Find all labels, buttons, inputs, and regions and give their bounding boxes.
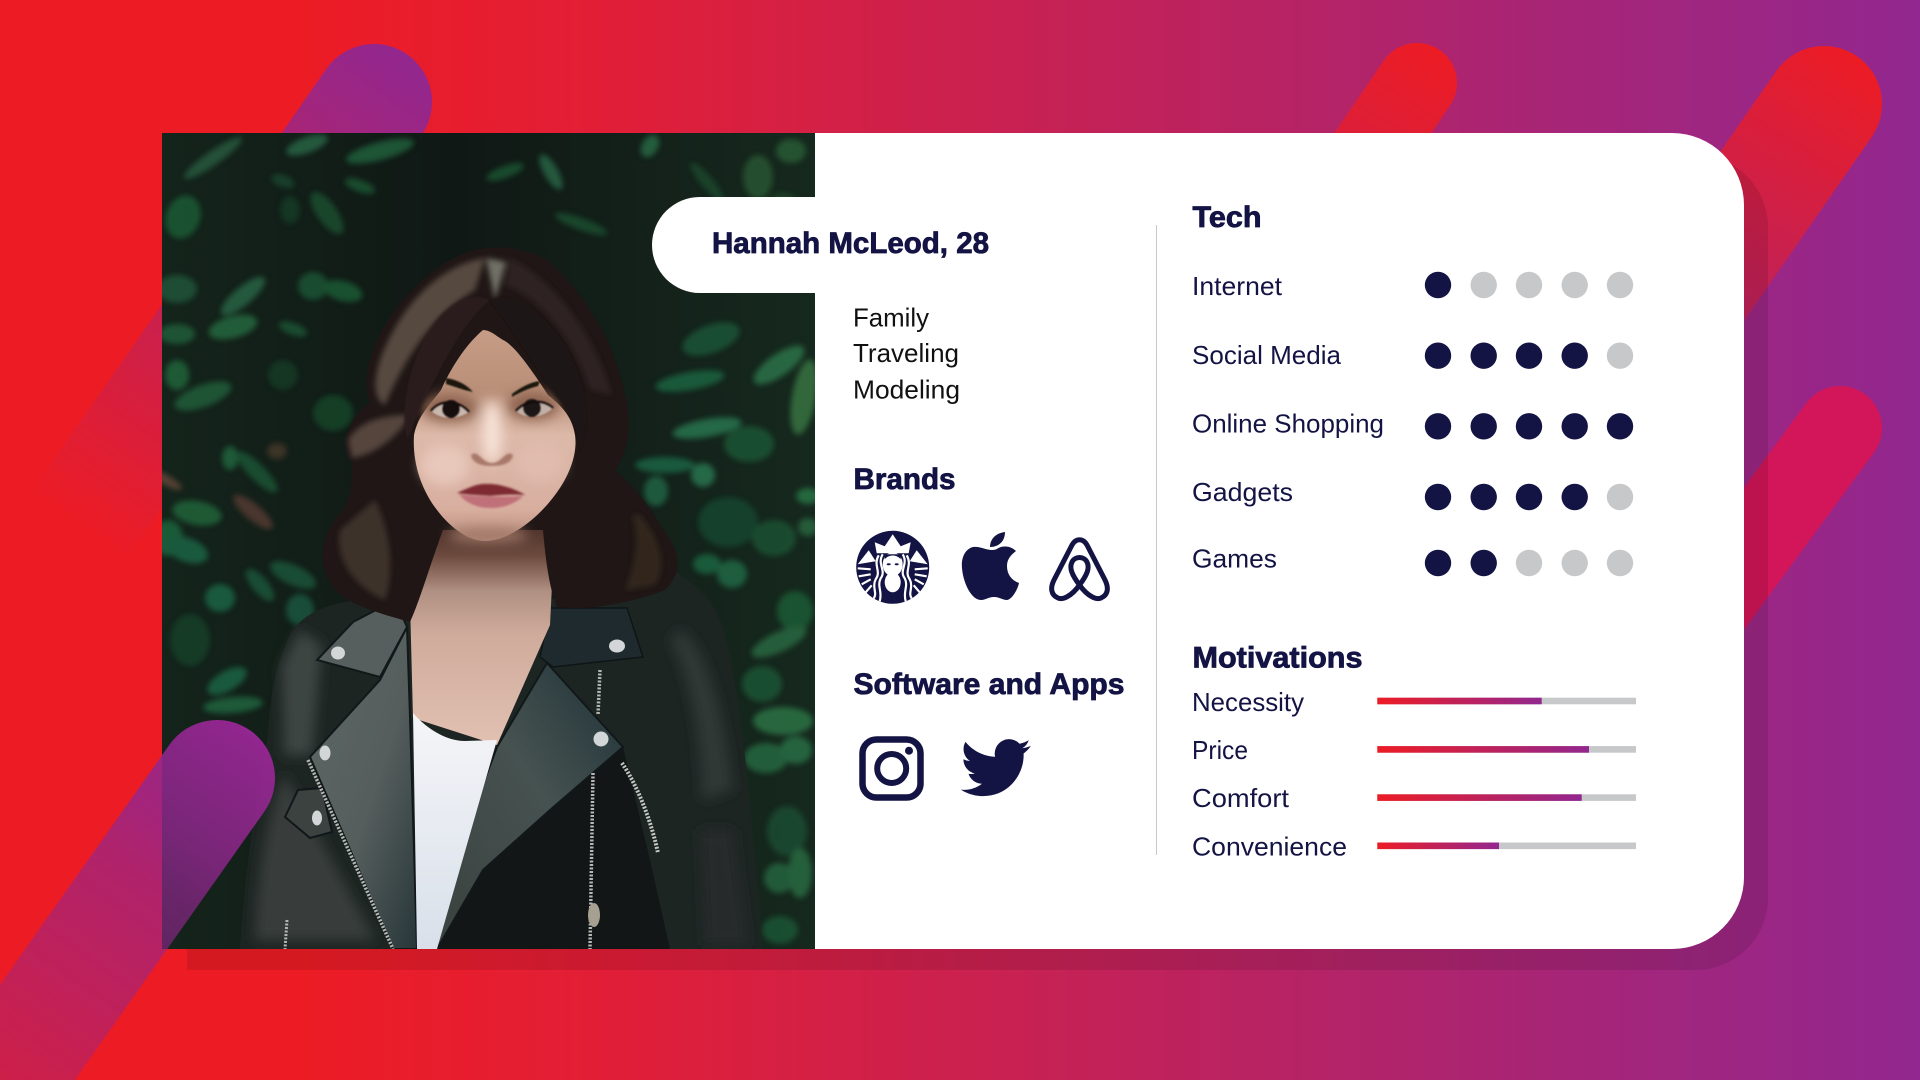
rating: online shopping: Online Shopping <box>1192 408 1384 438</box>
interests list: Modeling <box>853 374 960 404</box>
left collar <box>315 611 408 678</box>
tech ratings <box>1192 271 1633 576</box>
left lapel <box>310 627 417 949</box>
interests list <box>853 302 960 404</box>
jacket sheen <box>255 630 748 945</box>
rating: social media <box>1192 340 1633 370</box>
icon: apple <box>962 532 1019 600</box>
rating: online shopping <box>1192 408 1633 439</box>
bar: comfort: Comfort <box>1192 783 1290 813</box>
white tee <box>413 713 497 949</box>
background capsule: top centre <box>1200 83 1417 400</box>
icon: twitter <box>961 739 1031 796</box>
motivations heading: Motivations <box>1192 642 1362 674</box>
icon: instagram <box>862 740 920 798</box>
face <box>404 297 586 542</box>
bar: convenience <box>1192 832 1636 862</box>
portrait photo <box>148 130 822 949</box>
capsule overlapping the photo <box>0 720 275 1080</box>
nose <box>471 454 513 466</box>
jacket studs <box>312 640 625 826</box>
name heading: Hannah McLeod, 28 <box>712 227 989 260</box>
eye socket shadows <box>421 392 564 542</box>
software and apps heading: Software and Apps <box>854 668 1124 701</box>
bar: convenience: Convenience <box>1192 832 1347 862</box>
motivations bars <box>1192 687 1636 862</box>
bar: comfort <box>1192 783 1636 813</box>
dark lower right body <box>437 747 670 949</box>
rating: internet: Internet <box>1192 271 1283 301</box>
background capsule: lower right <box>1640 428 1840 700</box>
right lapel <box>437 663 623 949</box>
rating: internet <box>1192 271 1633 301</box>
brows <box>446 378 540 397</box>
fringe <box>404 297 490 440</box>
lips <box>457 484 525 508</box>
zips <box>285 670 658 949</box>
icon: airbnb <box>1052 540 1107 599</box>
background capsule: top right <box>1585 104 1824 448</box>
rating: gadgets: Gadgets <box>1192 477 1293 507</box>
background capsule: top left <box>60 102 374 552</box>
tech heading: Tech <box>1192 201 1262 234</box>
jacket <box>240 565 762 949</box>
icon: starbucks <box>856 531 929 604</box>
brands heading: Brands <box>854 463 956 496</box>
bar: price <box>1192 735 1636 765</box>
hair highlights <box>339 258 661 600</box>
interests list: Family <box>853 302 929 332</box>
rating: games <box>1192 544 1633 576</box>
hair <box>322 248 678 622</box>
interests list: Traveling <box>853 338 959 368</box>
left pocket flap <box>285 788 332 838</box>
right collar <box>540 608 643 667</box>
rating: social media: Social Media <box>1192 340 1342 370</box>
rating: gadgets <box>1192 477 1633 510</box>
rating: games: Games <box>1192 544 1277 574</box>
bar: price: Price <box>1192 735 1248 765</box>
bar: necessity <box>1192 687 1636 717</box>
card shadow <box>187 155 1768 970</box>
name pill <box>652 197 989 293</box>
white card <box>162 133 1744 949</box>
eyes <box>431 399 553 418</box>
bar: necessity: Necessity <box>1192 687 1304 717</box>
neck and chest <box>408 525 555 745</box>
